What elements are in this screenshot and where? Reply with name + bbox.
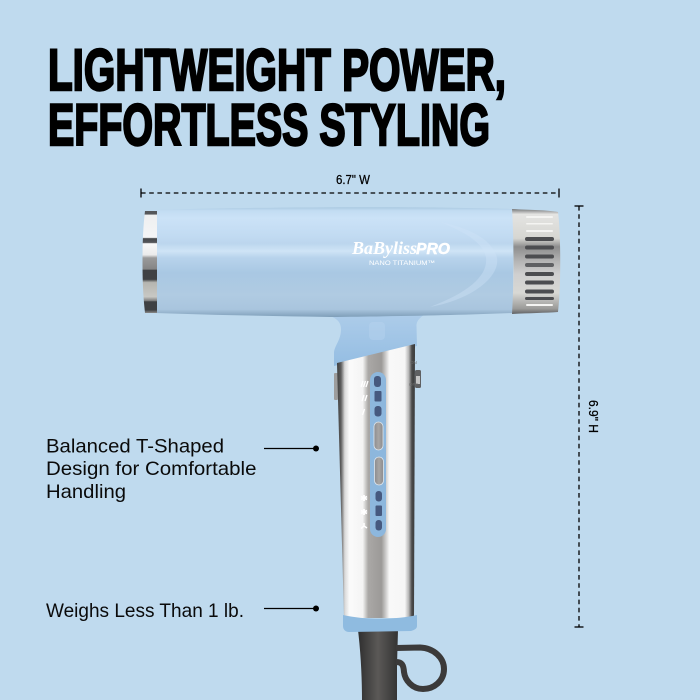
control strip xyxy=(370,372,386,537)
callout: balanced design: Design for Comfortable xyxy=(46,458,256,480)
switch labels: OFF xyxy=(409,382,418,387)
steel handle xyxy=(337,344,415,618)
left chrome ring xyxy=(142,211,157,313)
title xyxy=(48,38,506,158)
side button xyxy=(334,373,338,400)
heat and speed marks xyxy=(361,381,368,528)
switch labels xyxy=(409,360,418,387)
BaBylissPRO logo: PRO xyxy=(416,241,450,258)
callout: balanced design xyxy=(46,436,319,503)
BaBylissPRO logo: BaByliss xyxy=(351,238,417,258)
neck highlight xyxy=(369,322,385,340)
right grille xyxy=(512,209,560,314)
callout: balanced design: Handling xyxy=(46,481,126,503)
title: EFFORTLESS STYLING xyxy=(48,93,490,158)
hair dryer xyxy=(142,207,560,700)
callout: balanced design: Balanced T-Shaped xyxy=(46,436,224,458)
power cord xyxy=(358,630,398,700)
BaBylissPRO logo: NANO TITANIUM™ xyxy=(369,260,435,267)
callout: weight: Weighs Less Than 1 lb. xyxy=(46,600,244,622)
barrel swoosh xyxy=(430,222,497,307)
power switch xyxy=(415,370,421,388)
BaBylissPRO logo xyxy=(351,238,450,267)
title: LIGHTWEIGHT POWER, xyxy=(48,38,506,103)
width dimension: 6.7" W: 6.7" W xyxy=(336,173,370,187)
switch labels: ON xyxy=(410,360,417,365)
hanging loop xyxy=(396,648,444,689)
height dimension: 6.9" H: 6.9" H xyxy=(586,400,600,433)
barrel xyxy=(155,207,513,317)
neck collar xyxy=(318,312,428,366)
handle cuff xyxy=(343,615,417,632)
